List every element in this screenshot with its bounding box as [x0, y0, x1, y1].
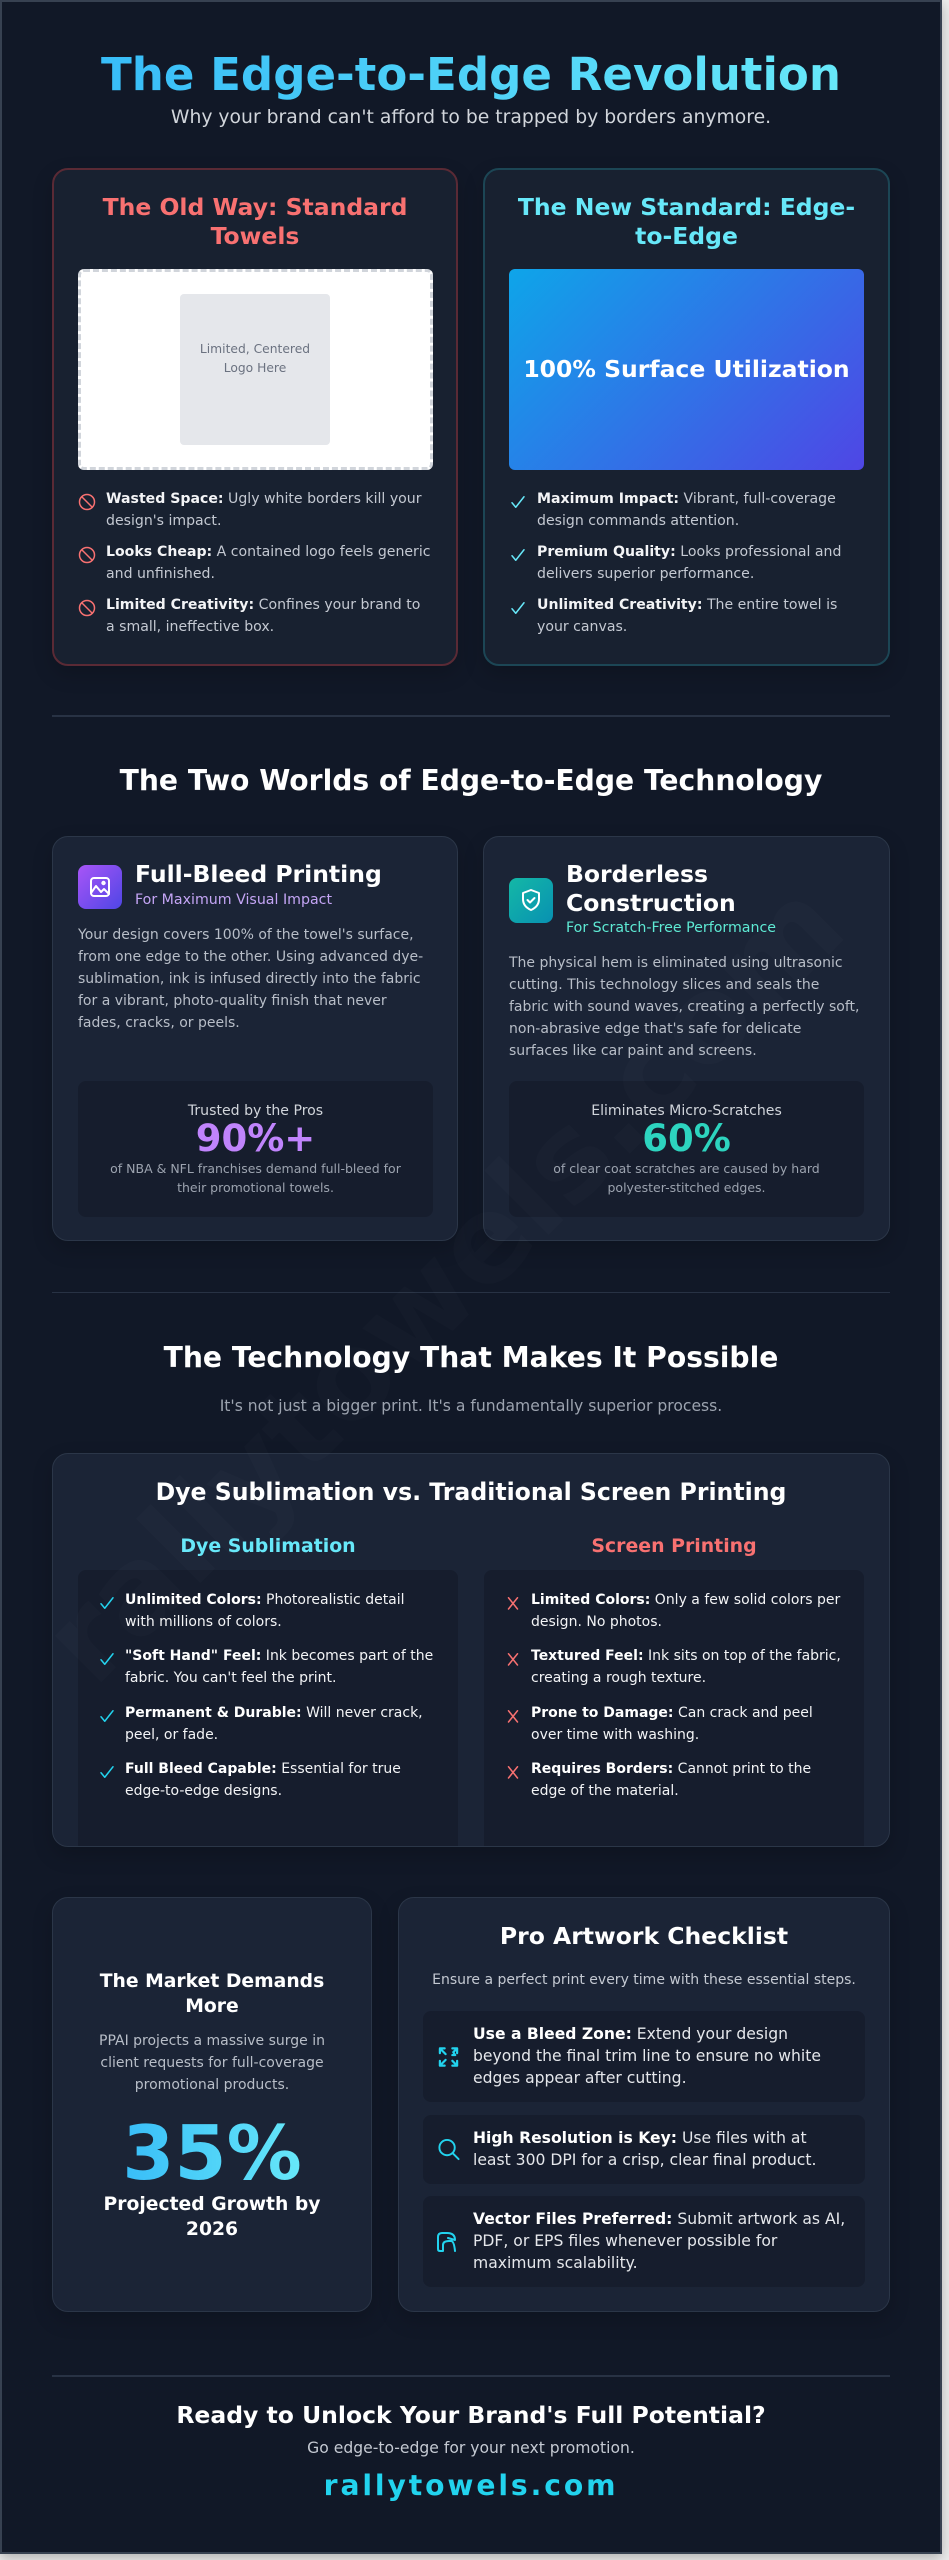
item: unlimited colors: with millions of colors. — [125, 1614, 282, 1630]
subtitle: scratch-free: For Scratch-Free Performance — [566, 920, 776, 936]
stat label: Trusted by the Pros — [188, 1103, 323, 1119]
text: High Resolution is Key: Use files with at — [473, 2129, 807, 2147]
item: prone to damage: over time with washing. — [531, 1727, 699, 1743]
item: unlimited colors — [100, 1592, 405, 1630]
heading: borderless construction: Construction — [566, 888, 736, 916]
item: permanent: Permanent & Durable: Will never crack, — [125, 1705, 423, 1721]
description: PPAI projects a massive surge in — [99, 2033, 325, 2049]
drawback: limited creativity: Limited Creativity: Confines your brand to — [106, 597, 420, 613]
section subheading: It's not just a bigger print. It's a fundamentally superior process. — [220, 1397, 722, 1415]
item: permanent — [100, 1705, 423, 1743]
benefit: premium quality: delivers superior performance. — [537, 566, 754, 582]
stat label: 2026 — [186, 2219, 238, 2240]
drawback: wasted space: design's impact. — [106, 513, 221, 529]
call to action heading: Ready to Unlock Your Brand's Full Potential? — [176, 2401, 766, 2429]
subtitle: visual impact: For Maximum Visual Impact — [135, 892, 332, 908]
panel: comparison — [52, 1453, 890, 1847]
description: promotional products. — [135, 2077, 289, 2093]
panel: full-bleed printing — [52, 836, 458, 1241]
text: Use a Bleed Zone: Extend your design — [473, 2025, 788, 2043]
section heading: two worlds: The Two Worlds of Edge-to-Edge Technology — [120, 764, 822, 797]
item: requires borders — [508, 1761, 811, 1799]
stat box: 90%+ — [78, 1081, 433, 1217]
title: The Edge-to-Edge Revolution — [101, 48, 841, 101]
text: maximum scalability. — [473, 2254, 638, 2272]
heading: market: The Market Demands — [100, 1971, 324, 1992]
item: full bleed: edge-to-edge designs. — [125, 1783, 282, 1799]
panel: market demand — [52, 1897, 372, 2312]
column: dye sublimation — [78, 1570, 458, 1860]
stat label: Projected Growth by — [103, 2194, 321, 2215]
benefit: maximum impact: Maximum Impact: Vibrant, full-coverage — [537, 491, 836, 507]
text: least 300 DPI for a crisp, clear final product. — [473, 2151, 816, 2169]
heading: borderless construction: Borderless — [566, 860, 708, 888]
heading: checklist: Pro Artwork Checklist — [500, 1922, 788, 1950]
text: edges appear after cutting. — [473, 2069, 687, 2087]
description: fades, cracks, or peels. — [78, 1015, 240, 1031]
description: client requests for full-coverage — [100, 2055, 324, 2071]
benefit: unlimited creativity — [511, 597, 837, 635]
panel: the new standard — [483, 168, 890, 666]
description: cutting. This technology slices and seals the — [509, 977, 819, 993]
item: full bleed — [100, 1761, 401, 1799]
watermark: rallytowels.com — [16, 855, 871, 1710]
text: beyond the final trim line to ensure no white — [473, 2047, 821, 2065]
benefit: unlimited creativity: your canvas. — [537, 619, 627, 635]
drawback: limited creativity: a small, ineffective box. — [106, 619, 274, 635]
towel illustration: edge-to-edge — [509, 269, 864, 470]
description: from one edge to the other. Using advanced dye- — [78, 949, 423, 965]
stat note: of NBA & NFL franchises demand full-bleed for — [110, 1161, 401, 1176]
drawback: looks cheap — [78, 544, 431, 582]
benefit: premium quality — [511, 544, 841, 582]
stat note — [110, 1161, 401, 1195]
drawback: wasted space: Wasted Space: Ugly white borders kill your — [106, 491, 422, 507]
item: limited colors: Limited Colors: Only a few solid colors per — [531, 1592, 840, 1608]
heading: full-bleed printing: Full-Bleed Printing — [135, 860, 382, 888]
description: for a vibrant, photo-quality finish that never — [78, 993, 387, 1009]
towel illustration: standard — [78, 269, 433, 470]
website: rallytowels.com — [324, 2469, 618, 2502]
column: screen printing — [484, 1570, 864, 1860]
panel: borderless construction — [483, 836, 890, 1241]
item: permanent: peel, or fade. — [125, 1727, 218, 1743]
description — [99, 2033, 325, 2093]
drawback: looks cheap: Looks Cheap: A contained logo feels generic — [106, 544, 431, 560]
item: textured feel — [508, 1648, 841, 1686]
item: full bleed: Full Bleed Capable: Essential for true — [125, 1761, 401, 1777]
drawback: limited creativity — [78, 597, 420, 635]
logo placeholder: Limited, Centered — [200, 342, 310, 356]
logo placeholder: Logo Here — [224, 361, 286, 375]
icon: shield check — [509, 878, 553, 923]
item: soft hand: fabric. You can't feel the print. — [125, 1670, 336, 1686]
item: limited colors — [508, 1592, 840, 1630]
stat note: of clear coat scratches are caused by hard — [553, 1161, 820, 1176]
description: Your design covers 100% of the towel's surface, — [78, 927, 414, 943]
list: old way drawbacks — [78, 491, 431, 635]
stat label: Eliminates Micro-Scratches — [591, 1103, 782, 1119]
icon: vector shape — [437, 2232, 456, 2252]
icon: expand — [438, 2047, 458, 2067]
stat label — [103, 2194, 321, 2240]
item: requires borders: edge of the material. — [531, 1783, 679, 1799]
heading: new standard: The New Standard: Edge- — [518, 193, 855, 221]
stat note: their promotional towels. — [177, 1180, 334, 1195]
benefit: maximum impact — [511, 491, 836, 529]
description: surfaces like car paint and screens. — [509, 1043, 757, 1059]
subtitle: Why your brand can't afford to be trapped by borders anymore. — [171, 107, 771, 128]
text — [473, 2210, 845, 2272]
checklist item: resolution — [423, 2115, 865, 2184]
description: sublimation, ink is infused directly into the fabric — [78, 971, 421, 987]
benefit: maximum impact: design commands attention. — [537, 513, 739, 529]
heading: borderless construction — [566, 860, 736, 916]
stat box: 60% — [509, 1081, 864, 1217]
item: requires borders: Requires Borders: Cannot print to the — [531, 1761, 811, 1777]
logo placeholder — [180, 294, 330, 445]
checklist item: vector — [423, 2196, 865, 2287]
text — [473, 2025, 821, 2087]
call to action text: Go edge-to-edge for your next promotion. — [307, 2439, 635, 2457]
item: limited colors: design. No photos. — [531, 1614, 662, 1630]
heading: comparison: Dye Sublimation vs. Traditional Screen Printing — [156, 1478, 786, 1506]
description: non-abrasive edge that's safe for delicate — [509, 1021, 801, 1037]
heading: market — [100, 1971, 324, 2017]
item: textured feel: Textured Feel: Ink sits on top of the fabric, — [531, 1648, 841, 1664]
item: soft hand: "Soft Hand" Feel: Ink becomes part of the — [125, 1648, 433, 1664]
text — [473, 2129, 816, 2169]
description — [508, 955, 859, 1059]
towel illustration: edge-to-edge: 100% Surface Utilization — [523, 355, 850, 383]
item: textured feel: creating a rough texture. — [531, 1670, 706, 1686]
heading: new standard: to-Edge — [635, 222, 738, 250]
text: Vector Files Preferred: Submit artwork as AI, — [473, 2210, 845, 2228]
panel: checklist — [398, 1897, 890, 2312]
description: The physical hem is eliminated using ultrasonic — [509, 955, 843, 971]
icon: search — [438, 2139, 460, 2160]
heading: market: More — [185, 1996, 239, 2017]
icon: image — [78, 865, 122, 909]
column heading: dye sublimation: Dye Sublimation — [180, 1535, 356, 1557]
checklist item: bleed zone — [423, 2011, 865, 2102]
benefit: premium quality: Premium Quality: Looks professional and — [537, 544, 841, 560]
stat note: polyester-stitched edges. — [607, 1180, 766, 1195]
heading: new standard — [518, 193, 855, 250]
heading: old way — [102, 193, 407, 250]
benefit: unlimited creativity: Unlimited Creativity: The entire towel is — [537, 597, 837, 613]
item: unlimited colors: Unlimited Colors: Photorealistic detail — [125, 1592, 405, 1608]
item: prone to damage: Prone to Damage: Can crack and peel — [531, 1705, 813, 1721]
text: PDF, or EPS files whenever possible for — [473, 2232, 777, 2250]
big stat: 35% — [122, 2109, 302, 2197]
item: soft hand — [100, 1648, 433, 1686]
section heading: technology: The Technology That Makes It Possible — [164, 1341, 778, 1374]
description — [78, 927, 423, 1031]
footer — [176, 2401, 766, 2502]
panel: the old way — [52, 168, 458, 666]
drawback: looks cheap: and unfinished. — [106, 566, 215, 582]
intro: Ensure a perfect print every time with these essential steps. — [432, 1972, 856, 1988]
stat note — [553, 1161, 820, 1195]
stat value: 90%+ — [196, 1117, 315, 1160]
item: prone to damage — [508, 1705, 813, 1743]
stat value: 60% — [642, 1117, 731, 1160]
heading: old way: The Old Way: Standard — [103, 193, 407, 221]
list: new standard benefits — [511, 491, 841, 635]
column heading: screen printing: Screen Printing — [591, 1535, 757, 1557]
description: fabric with sound waves, creating a perfectly soft, — [509, 999, 859, 1015]
heading: old way: Towels — [211, 222, 299, 250]
drawback: wasted space — [78, 491, 422, 529]
